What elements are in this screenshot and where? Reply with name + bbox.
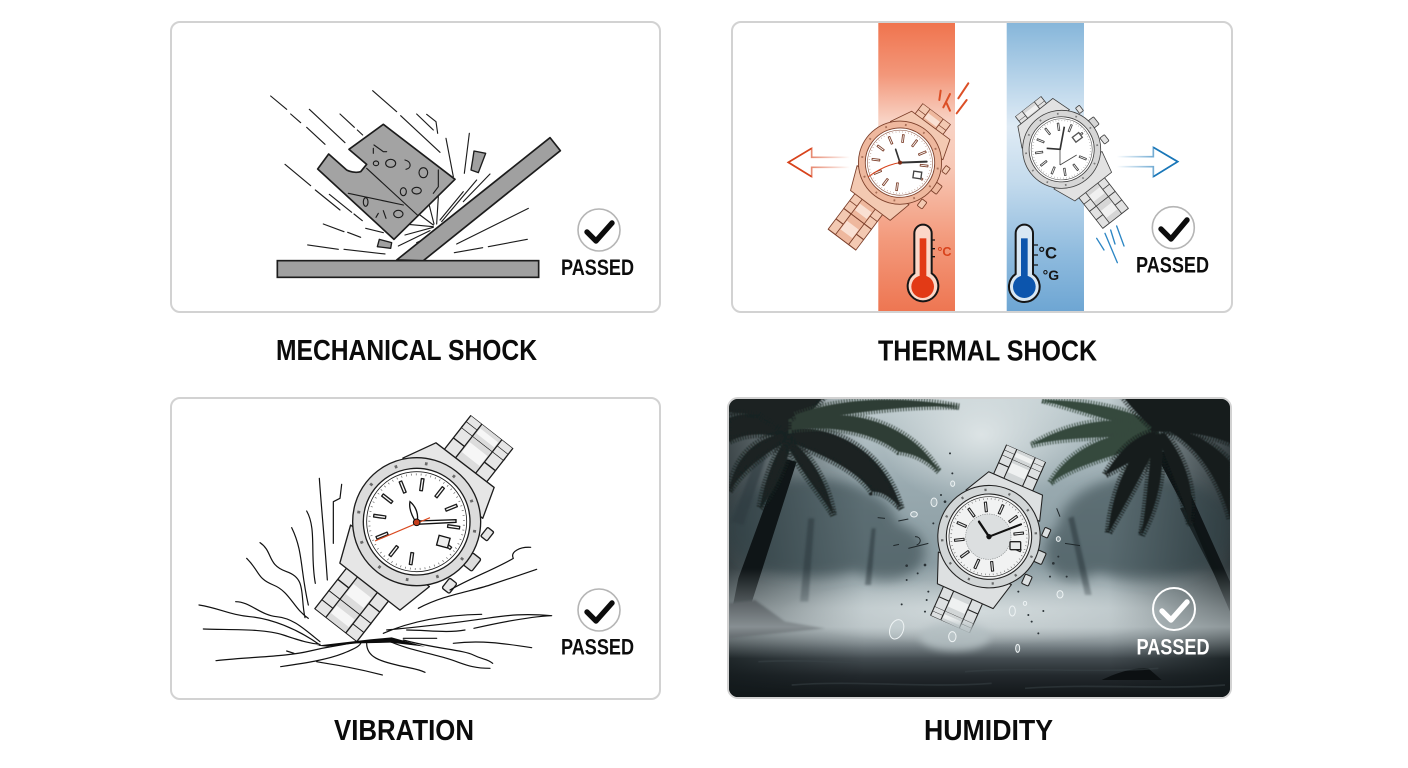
passed badge: PASSED — [1136, 634, 1210, 660]
hot thermometer: °C — [937, 245, 952, 259]
passed badge — [561, 589, 634, 660]
cold streaks — [1097, 226, 1124, 263]
passed badge — [1136, 588, 1210, 660]
cold thermometer: °G — [1043, 267, 1059, 283]
rainforest scene background — [729, 399, 1230, 697]
chilled watch hands and date — [1047, 127, 1082, 165]
passed badge: PASSED — [1136, 252, 1209, 278]
heat arrow — [788, 148, 850, 177]
distant palm trunks — [732, 452, 1092, 602]
water droplets — [887, 481, 1063, 652]
steel ramp — [397, 138, 560, 261]
heading: humidity: HUMIDITY — [924, 715, 1053, 747]
hot thermometer — [908, 225, 952, 301]
passed badge: PASSED — [561, 255, 634, 280]
ground crack lines — [199, 547, 552, 675]
chilled watch — [997, 79, 1151, 242]
fading lower strap — [920, 623, 990, 651]
watch hands and date — [375, 502, 456, 548]
cold arrow — [1117, 147, 1178, 177]
panel: mechanical shock — [171, 22, 660, 312]
illustration: concrete block striking a steel ramp — [271, 91, 560, 277]
cold thermometer: °C — [1038, 243, 1057, 262]
debris fragments — [471, 151, 486, 173]
thermal illustration — [788, 79, 1178, 302]
vibration illustration — [199, 390, 552, 675]
heated watch — [809, 89, 975, 269]
panel: thermal shock — [732, 22, 1232, 312]
panel: humidity — [727, 397, 1232, 699]
shoreline rocks and low fog — [728, 600, 825, 638]
palm trunks — [734, 452, 1230, 612]
hands and date — [979, 522, 1021, 550]
motion and impact lines — [271, 91, 528, 254]
right palm dark fronds — [1105, 395, 1235, 535]
heading: vibration: VIBRATION — [334, 715, 474, 747]
watch on cracked ground — [285, 390, 547, 671]
passed badge — [1136, 207, 1209, 278]
left palm upper fronds — [792, 400, 959, 472]
left palm fronds — [725, 395, 901, 515]
right palm green fronds — [1032, 400, 1155, 483]
cold band — [1007, 23, 1084, 311]
concrete block — [318, 124, 455, 239]
heated watch hands and date — [868, 149, 927, 179]
passed badge — [561, 209, 634, 280]
hot band — [878, 23, 955, 311]
heading: thermal shock: THERMAL SHOCK — [878, 336, 1097, 368]
heading: mechanical shock: MECHANICAL SHOCK — [276, 335, 537, 367]
impact point — [317, 637, 425, 647]
heat sparks — [939, 83, 968, 113]
speckled centre dial — [966, 514, 1011, 559]
storm-exposed watch and droplets — [878, 433, 1080, 652]
passed badge: PASSED — [561, 634, 634, 660]
ground slab — [277, 261, 539, 277]
cold thermometer — [1009, 225, 1059, 302]
panel: vibration — [171, 390, 660, 699]
distant forest canopy — [725, 475, 1232, 582]
block cracks and pores — [348, 145, 438, 215]
vibration lines — [247, 478, 342, 618]
